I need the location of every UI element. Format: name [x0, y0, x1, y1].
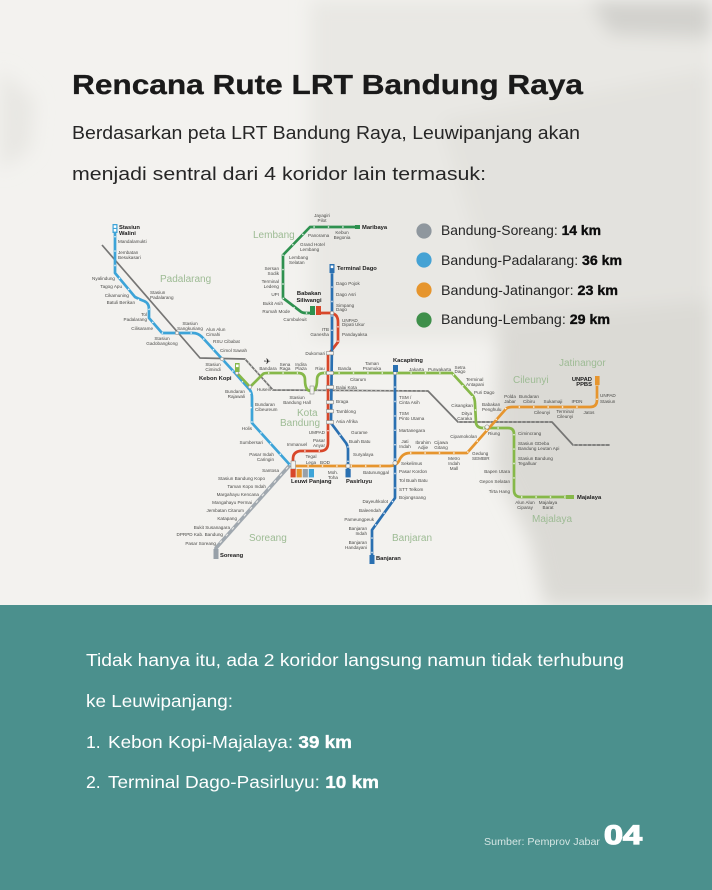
line: Dago corridor — [331, 265, 348, 473]
station labels: Martanegara — [399, 428, 425, 433]
station labels — [92, 213, 616, 550]
background: marble texture — [0, 0, 712, 606]
station labels: TSM — [399, 411, 409, 416]
station labels: Banjaran — [349, 526, 367, 531]
station labels: Dipati Ukur — [342, 322, 365, 327]
station labels: Pasar Indah — [249, 452, 274, 457]
station labels: Kebun — [335, 230, 349, 235]
station labels: Rajawali — [228, 394, 245, 399]
station labels: Padalarang — [150, 295, 174, 300]
line: Soreang corridor — [216, 465, 290, 556]
corridors text: Tidak hanya itu, ada 2 koridor langsung namun tidak terhubung — [86, 650, 624, 670]
station labels: Terminal — [466, 377, 483, 382]
station labels: Bundaran — [225, 389, 245, 394]
station labels: Gedung — [472, 451, 489, 456]
corridors text: 1. — [86, 732, 101, 752]
station labels: Cileunyi — [557, 414, 573, 419]
legend item: Padalarang: Bandung-Padalarang: 36 km — [441, 253, 622, 268]
station labels: Dayeuhkolot — [362, 499, 389, 504]
station labels: Cilisarame — [131, 326, 153, 331]
station labels: Caringin — [257, 457, 274, 462]
region labels: Kota — [297, 408, 318, 419]
station labels: Cumbuleuit — [283, 317, 307, 322]
station labels: IPDN — [572, 399, 582, 404]
station labels: DPRPD Kab. Bandung — [177, 532, 223, 537]
station labels: Gitang — [434, 445, 448, 450]
station labels: Pramuka — [363, 366, 382, 371]
station labels: Stasiun — [154, 336, 170, 341]
region labels: Cileunyi — [513, 375, 549, 386]
station labels: UNPAD — [600, 393, 616, 398]
station labels: Cinta Asih — [399, 400, 420, 405]
station labels: Cileunyi — [534, 410, 550, 415]
source note: Sumber: Pemprov Jabar — [484, 836, 600, 848]
station labels: Riung — [488, 431, 500, 436]
station labels: Terminal — [262, 279, 279, 284]
station labels: Jayagiri — [314, 213, 330, 218]
station labels: Pinto Utama — [399, 416, 425, 421]
corridors text: Terminal Dago-Pasirluyu: 10 km — [108, 772, 379, 792]
station labels: Padalarang — [124, 317, 147, 322]
station labels: Jatos — [584, 410, 595, 415]
station labels: Pandayaksa — [342, 332, 368, 337]
region labels: Padalarang — [160, 274, 211, 285]
station labels: Tol — [141, 312, 147, 317]
line: Kacapiring-Banjaran — [372, 365, 395, 562]
station labels: Gadobangkong — [146, 341, 178, 346]
station labels: Jabar — [504, 399, 516, 404]
legend item: Jatinangor: Bandung-Jatinangor: 23 km — [441, 283, 618, 298]
station labels: Jembatan Citarum — [206, 508, 244, 513]
station labels: Polda — [504, 394, 516, 399]
line: Jatinangor corridor — [293, 377, 597, 466]
station labels: Santosa — [262, 468, 279, 473]
station labels: Taman — [365, 361, 379, 366]
station labels: Ledeng — [264, 284, 279, 289]
terminal station names: PPBS — [576, 382, 592, 388]
station labels: Bundaran — [255, 402, 275, 407]
station labels: Cimol Sawah — [220, 348, 248, 353]
station labels: Stasiun — [182, 321, 198, 326]
station labels: Sena — [280, 362, 291, 367]
line: Red corridor — [293, 313, 338, 468]
station labels: Ibrahim — [415, 440, 431, 445]
station labels: UNPAD — [342, 318, 358, 323]
station labels: Tol Buah Batu — [399, 478, 428, 483]
corridors text: 2. — [86, 772, 101, 792]
station labels: Dukomari — [305, 351, 325, 356]
station labels: STT Telkom — [399, 487, 424, 492]
terminal station names: Kebon Kopi — [199, 376, 232, 382]
icon: airplane: ✈ — [264, 357, 271, 366]
station labels: Jati — [401, 439, 409, 444]
line: Lembang corridor — [283, 227, 358, 313]
station labels: Cimahi — [206, 332, 220, 337]
intro paragraph: menjadi sentral dari 4 koridor lain termasuk: — [72, 164, 486, 184]
station labels: Batununggal — [363, 470, 389, 475]
station labels: Sumbersari — [240, 440, 263, 445]
railway line — [102, 245, 610, 445]
station labels: Indah — [399, 444, 411, 449]
station labels: Besukasari — [118, 255, 141, 260]
station labels: Cibeureum — [255, 407, 278, 412]
station labels: Husein — [257, 387, 272, 392]
station labels: Baleendah — [359, 508, 381, 513]
station labels: Dago Pojok — [336, 281, 360, 286]
station labels: Pasar Soreang — [185, 541, 216, 546]
corridors text — [86, 650, 624, 792]
station labels: Margahayu Kencana — [217, 492, 259, 497]
station labels: Sodik — [268, 271, 280, 276]
station labels: Plaza — [295, 366, 307, 371]
station labels: Cikamuning — [105, 293, 129, 298]
corridors text: ke Leuwipanjang: — [86, 691, 233, 711]
station labels: Tegalluar — [518, 461, 537, 466]
terminal station names: Stasiun — [119, 225, 140, 231]
station labels: Stasiun GDeba — [518, 441, 550, 446]
station labels: Dago Asri — [336, 292, 356, 297]
station labels: Citarum — [350, 377, 366, 382]
station labels: Balai Kota — [336, 385, 357, 390]
line: Kebon Kopi-Majalaya — [237, 365, 573, 497]
station labels: Sersan — [264, 266, 279, 271]
station labels: SEMBIR — [472, 456, 490, 461]
legend: corridors — [416, 223, 622, 328]
station labels: Tamblong — [336, 409, 356, 414]
station labels: Bapen Utara — [484, 469, 510, 474]
intro paragraph — [72, 123, 580, 184]
terminal station names — [119, 225, 602, 562]
station labels: Mangahayu Permai — [212, 500, 252, 505]
region labels: Soreang — [249, 533, 287, 544]
line: Padalarang corridor — [115, 227, 290, 465]
station labels: Ditya — [462, 411, 472, 416]
station labels: Grand Hotel — [300, 242, 325, 247]
station labels: Buah Batu — [349, 439, 371, 444]
terminal station names: Terminal Dago — [337, 266, 377, 272]
station labels: Majalaya — [539, 500, 558, 505]
station labels: Batuli Berikan — [107, 300, 135, 305]
station labels: TSM / — [399, 395, 412, 400]
title: Rencana Rute LRT Bandung Raya — [72, 69, 584, 100]
station labels: Tirta Hang — [489, 489, 510, 494]
terminal station names: Maribaya — [362, 225, 388, 231]
station labels: Alun Alun — [206, 327, 226, 332]
terminal station names: Kacapiring — [393, 358, 423, 364]
station labels: Babakan — [482, 402, 501, 407]
station labels: Gurame — [351, 430, 368, 435]
station labels: Pasar — [313, 438, 325, 443]
station labels: UMPAD — [309, 430, 326, 435]
terminal station names: Majalaya — [577, 495, 602, 501]
station labels: Riau — [315, 366, 325, 371]
station labels: RSU Cibabat — [213, 339, 241, 344]
station labels: Lembang — [289, 255, 309, 260]
corridors text: Kebon Kopi-Majalaya: 39 km — [108, 732, 352, 752]
station labels: Asia Afrika — [336, 419, 358, 424]
station labels: Banda — [338, 366, 352, 371]
terminal station names: Babakan — [297, 291, 322, 297]
station labels: Braga — [336, 399, 349, 404]
station labels: Katapang — [217, 516, 237, 521]
terminal station names: Pasirluyu — [346, 479, 373, 485]
station labels: Cijawa — [434, 440, 448, 445]
station labels: Ciparay — [517, 505, 534, 510]
station labels: Toha — [328, 475, 338, 480]
station labels: Mall — [450, 466, 458, 471]
region labels: Banjaran — [392, 533, 432, 544]
station labels: Jakarta — [409, 367, 425, 372]
station labels: UPI — [271, 292, 279, 297]
region labels: Lembang — [253, 230, 295, 241]
station labels: Indah — [448, 461, 460, 466]
station labels: Suryalaya — [353, 452, 374, 457]
panel: additional corridors — [0, 605, 712, 890]
page number: 04 — [604, 820, 642, 850]
station labels: Jembatan — [118, 250, 139, 255]
station labels: Bojongsoang — [399, 495, 426, 500]
station labels: Sangkuriang — [177, 326, 203, 331]
station markers — [175, 311, 489, 469]
station labels: Tegal — [306, 454, 316, 459]
station labels: Nyalindung — [92, 276, 115, 281]
terminal station names: Walini — [119, 231, 136, 237]
station labels: Pasar Kordon — [399, 469, 428, 474]
station labels: Lega — [306, 460, 317, 465]
station labels: Handayani — [345, 545, 367, 550]
station labels: Raga — [280, 366, 291, 371]
station labels: Immanuel — [287, 442, 307, 447]
station labels: Lembang — [300, 247, 320, 252]
station labels: Dago — [455, 369, 466, 374]
station labels: Terminal — [556, 409, 574, 414]
station labels: Caraka — [457, 416, 472, 421]
station labels: Moh. — [328, 470, 338, 475]
terminal station names: UNPAD — [572, 377, 592, 383]
station labels: Barat — [543, 505, 554, 510]
station labels: Indah — [356, 531, 367, 536]
station labels: Purwakarta — [428, 367, 452, 372]
route map — [92, 213, 616, 564]
station labels: Metro — [448, 456, 460, 461]
station labels: Stasiun Bandung Kopo — [218, 476, 265, 481]
station labels: BOD — [320, 460, 331, 465]
station labels: Cisangkan — [451, 403, 473, 408]
station labels: Taman Kopo Indah — [227, 484, 266, 489]
station labels: Simpang — [336, 303, 355, 308]
station labels: Stasiun — [289, 395, 305, 400]
legend item: Soreang: Bandung-Soreang: 14 km — [441, 223, 601, 238]
station labels: Banjaran — [349, 540, 367, 545]
station labels: Pameungpeuk — [344, 517, 375, 522]
station labels: Sekelimus — [401, 461, 423, 466]
station labels: Panorama — [308, 233, 330, 238]
station labels: Pilot — [318, 218, 327, 223]
station labels: ITB — [322, 327, 329, 332]
station labels: Stasiun Bandung — [518, 456, 553, 461]
station labels: Adjie — [418, 445, 429, 450]
station labels: Stasiun — [205, 362, 221, 367]
station labels: Antapani — [466, 382, 484, 387]
station labels: Indira — [295, 362, 307, 367]
station labels: Mandalamukti — [118, 239, 147, 244]
region labels — [160, 230, 606, 544]
station labels: Cimindi — [205, 367, 221, 372]
station labels: Bandung Hall — [283, 400, 311, 405]
station labels: Sukamaji — [544, 399, 562, 404]
legend item: Lembang: Bandung-Lembang: 29 km — [441, 312, 610, 327]
terminal badges — [112, 224, 600, 564]
station labels: Cipamokolan — [450, 434, 477, 439]
station labels: Stasiun — [150, 290, 166, 295]
terminal station names: Banjaran — [376, 556, 401, 562]
station labels: Cimincrang — [518, 431, 542, 436]
station labels: Begonia — [334, 235, 351, 240]
intro paragraph: Berdasarkan peta LRT Bandung Raya, Leuwipanjang akan — [72, 123, 580, 143]
station labels: Gepon Selatan — [479, 479, 510, 484]
station labels: Cibiru — [523, 399, 535, 404]
station labels: Puri Dago — [474, 390, 495, 395]
station labels: Bandara — [259, 366, 277, 371]
terminal station names: Leuwi Panjang — [291, 479, 332, 485]
station labels: Setra — [455, 365, 466, 370]
station labels: Alun Alun — [515, 500, 535, 505]
station labels: Bundaran — [519, 394, 539, 399]
station labels: Anyar — [313, 443, 325, 448]
station labels: Bukit Asih — [263, 301, 283, 306]
region labels: Jatinangor — [559, 358, 606, 369]
station labels: Tagog Apu — [100, 284, 122, 289]
station labels: Selatan — [289, 260, 305, 265]
station labels: Rumah Mode — [262, 309, 290, 314]
terminal station names: Soreang — [220, 553, 244, 559]
station labels: Penghulu — [482, 407, 502, 412]
station labels: Holis — [242, 426, 253, 431]
station labels: Dago — [336, 307, 347, 312]
station labels: Stasiun — [600, 399, 616, 404]
terminal station names: Siliwangi — [296, 298, 322, 304]
station labels: Bukit Susanagara — [194, 525, 230, 530]
station labels: Ganesha — [310, 332, 329, 337]
region labels: Majalaya — [532, 514, 572, 525]
station labels: Bandung Leutan Api — [518, 446, 559, 451]
region labels: Bandung — [280, 418, 320, 429]
